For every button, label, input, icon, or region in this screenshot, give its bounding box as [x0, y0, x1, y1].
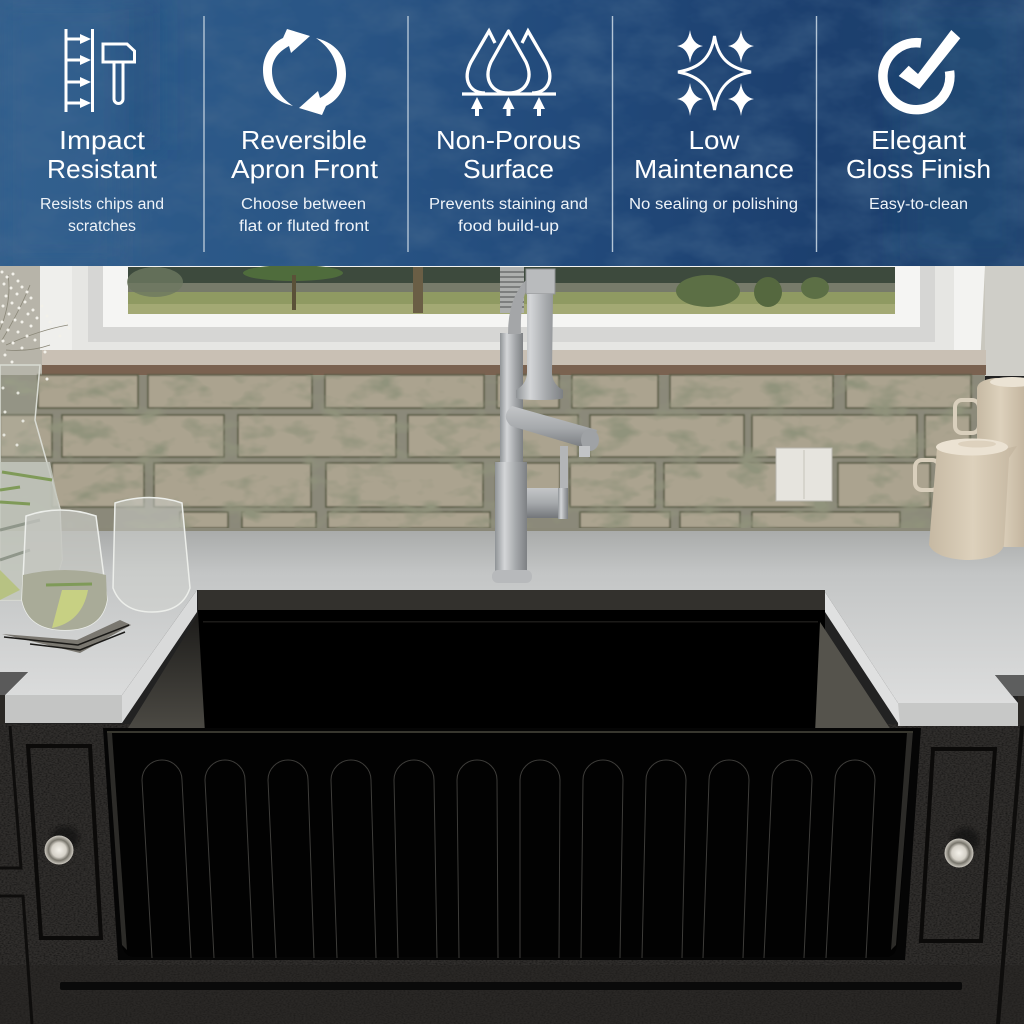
right door edge [998, 726, 1022, 1024]
description: scratches [68, 218, 136, 235]
right knob [944, 828, 979, 868]
fluted apron front [103, 728, 921, 960]
lever and handle [518, 446, 568, 519]
rear jug [955, 377, 1024, 547]
feature banner [0, 0, 1024, 266]
heading: Reversible [241, 125, 367, 155]
description: food build-up [458, 218, 559, 235]
icon: sparkles [677, 30, 754, 116]
window with garden view [72, 265, 954, 351]
ceramic jugs [915, 377, 1024, 560]
countertop back surface [0, 528, 1024, 703]
glass jar [0, 365, 62, 600]
brick backsplash [0, 375, 985, 530]
faucet body [495, 462, 527, 572]
heading: Non-Porous [436, 125, 581, 155]
feature: low maintenance [629, 30, 798, 213]
flutes [142, 760, 875, 958]
left knob [44, 826, 79, 864]
feature: reversible apron front [231, 29, 379, 235]
empty wine tumbler [113, 498, 190, 612]
counter left slab edge [5, 590, 197, 723]
faucet [492, 267, 599, 583]
icon: check in ring [883, 30, 960, 110]
counter right slab edge [825, 592, 1018, 726]
rear wall [0, 266, 1024, 376]
feature: non-porous surface [429, 31, 588, 235]
heading: Impact [59, 125, 146, 155]
wall light switch [776, 448, 832, 501]
sink interior [125, 590, 893, 733]
pull-down sprayer [516, 269, 563, 400]
heading: Gloss Finish [846, 154, 991, 184]
icon: wall and hammer [66, 29, 134, 112]
horizontal spout [506, 406, 599, 457]
description: Easy-to-clean [869, 196, 968, 213]
dividers [204, 16, 816, 252]
heading: Resistant [47, 154, 158, 184]
description: No sealing or polishing [629, 196, 798, 213]
stem [500, 333, 523, 463]
lower cabinet [0, 672, 1024, 1024]
front jug [915, 438, 1017, 560]
feature: elegant gloss finish [846, 30, 991, 213]
left recessed panel [28, 746, 101, 938]
feature: impact resistant [40, 29, 164, 235]
faucet base [492, 570, 532, 583]
dried flowers [0, 272, 69, 445]
folded napkin [2, 620, 131, 653]
tumbler with lime [22, 510, 107, 630]
icon: circular arrows [263, 29, 346, 115]
heading: Elegant [871, 125, 967, 155]
trees outside [127, 265, 829, 313]
stone window ledge [42, 350, 986, 375]
heading: Apron Front [231, 154, 379, 184]
spring hose [500, 267, 524, 313]
heading: Maintenance [634, 154, 794, 184]
icon: water drops on surface [462, 31, 556, 116]
description: Choose between [241, 196, 366, 213]
toe groove [60, 982, 962, 990]
heading: Surface [463, 154, 554, 184]
description: Prevents staining and [429, 196, 588, 213]
left glassware [0, 365, 190, 630]
heading: Low [688, 125, 740, 155]
description: flat or fluted front [239, 218, 370, 235]
description: Resists chips and [40, 196, 164, 213]
left door panels [0, 726, 32, 1024]
right recessed panel [921, 749, 995, 941]
curved neck [508, 280, 526, 334]
